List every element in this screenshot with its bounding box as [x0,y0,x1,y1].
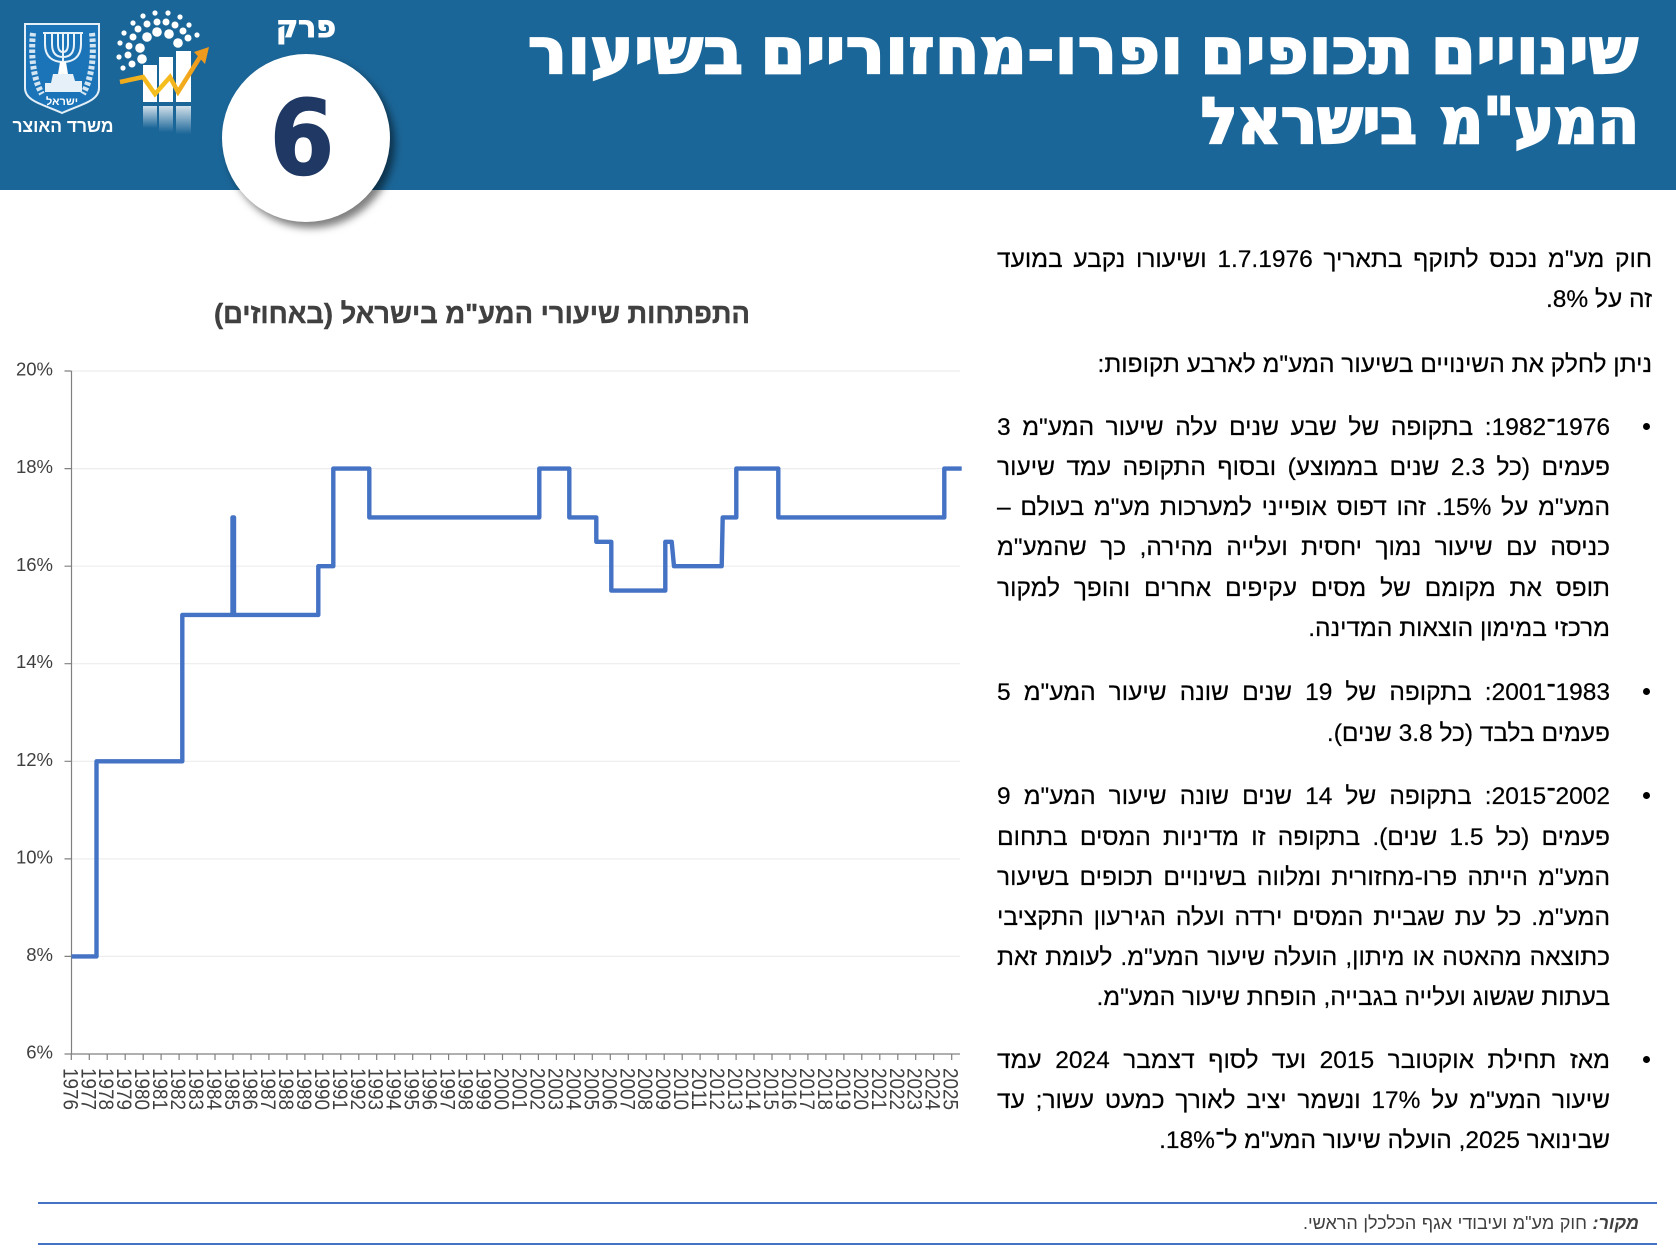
bullet: 1976-1982: כניסה עם שיעור נמוך יחסית ועלייה מהירה, כך שהמע"מ [997,534,1610,561]
x axis year labels: 2011 [687,1068,710,1110]
bullet: 1983-2001: פעמים בלבד (כל 3.8 שנים). [1327,720,1610,747]
x axis year labels: 2012 [705,1068,728,1110]
x axis year labels: 2013 [723,1068,746,1110]
title [528,15,1639,159]
x axis year labels: 2015 [759,1068,782,1110]
x axis year labels: 2017 [795,1068,818,1110]
x axis year labels: 1993 [364,1068,387,1110]
x axis year labels: 2004 [561,1068,584,1110]
x axis year labels: 1982 [166,1068,189,1110]
x axis year labels: 2021 [867,1068,890,1110]
panel: line chart of VAT rate [16,298,962,1110]
x axis year labels: 1989 [292,1068,315,1110]
x axis year labels: 2006 [597,1068,620,1110]
text block: intro: זה על 8%. [1546,286,1652,313]
y axis labels: 6% [26,1042,53,1062]
x axis year labels: 1994 [382,1068,405,1110]
chapter label: פרק [276,10,336,45]
bullet: 2002-2015: בעתות שגשוג ועלייה בגבייה, הופחת שיעור המע"מ. [1096,984,1610,1011]
x axis year labels: 1978 [94,1068,117,1110]
text block: four periods lead-in: ניתן לחלק את השינויים בשיעור המע"מ לארבע תקופות: [1098,351,1652,378]
text block: intro: חוק מע"מ נכנס לתוקף בתאריך 1.7.1976 ושיעורו נקבע במועד [997,246,1652,273]
x axis year labels: 1980 [130,1068,153,1110]
chart title: התפתחות שיעורי המע"מ בישראל (באחוזים) [214,298,750,329]
y axis labels: 12% [16,749,53,770]
chapter number: 6 [270,79,334,199]
x axis year labels: 1983 [184,1068,207,1110]
title: שינויים תכופים ופרו-מחזוריים בשיעור [528,15,1639,89]
x axis year labels: 2000 [490,1068,512,1110]
x axis year labels: 2022 [885,1068,908,1110]
x axis year labels: 2025 [939,1068,962,1110]
x axis year labels: 1995 [400,1068,423,1110]
x axis year labels: 1996 [418,1068,441,1110]
logo: chart with rising arrow [116,10,209,132]
x axis year labels: 2010 [669,1068,692,1110]
x axis year labels: 2018 [813,1068,836,1110]
y axis labels: 8% [26,944,53,965]
x axis year labels: 2023 [903,1068,926,1110]
bullet: 2015 to 2025: שבינואר 2025, הועלה שיעור המע"מ ל־18%. [1159,1127,1610,1154]
x axis year labels: 2016 [777,1068,800,1110]
logo: state emblem [12,23,114,136]
x axis year labels: 2003 [543,1068,566,1110]
x axis year labels: 1997 [436,1068,459,1110]
x axis year labels: 2005 [579,1068,602,1110]
bullet: 1983-2001: 1983־2001: בתקופה של 19 שנים שונה שיעור המע"מ 5 [997,679,1610,706]
bullet: 1976-1982 [996,414,1650,642]
bullet: 2002-2015 [997,783,1650,1011]
y axis labels: 14% [16,651,53,672]
x axis year labels: 1998 [454,1068,477,1110]
logo: state emblem: משרד האוצר [12,116,114,136]
x axis year labels: 2020 [849,1068,872,1110]
header band [0,0,1676,190]
y axis labels: 10% [16,846,53,868]
bullet: 1976-1982: 1976־1982: בתקופה של שבע שנים עלה שיעור המע"מ 3 [997,414,1610,441]
y axis labels [16,358,53,1062]
x axis year labels: 2024 [921,1068,944,1110]
x axis year labels: 1987 [256,1068,279,1110]
x axis year labels: 2019 [831,1068,854,1110]
bullet: 1983-2001 [997,679,1650,747]
logo: state emblem: ישראל [46,95,78,108]
x axis year labels: 1991 [328,1068,351,1110]
x axis year labels: 2009 [651,1068,674,1110]
bullet: 2015 to 2025: שיעור המע"מ על 17% ונשמר יציב לאורך כמעט עשור; עד [997,1087,1610,1114]
source note: מקור: חוק מע"מ ועיבודי אגף הכלכלן הראשי. [1303,1213,1639,1233]
bullet: 1976-1982: תופס את מקומם של מסים עקיפים אחרים והופך למקור [997,575,1610,602]
x axis year labels: 1979 [112,1068,135,1110]
x axis year labels: 1977 [76,1068,99,1110]
y axis labels: 20% [16,358,53,380]
data line: VAT rate step series [72,469,962,956]
bullet: 2015 to 2025: מאז תחילת אוקטובר 2015 ועד לסוף דצמבר 2024 עמד [997,1047,1610,1074]
bullet: 2002-2015: כתוצאה מהאטה או מיתון, הועלה שיעור המע"מ. לעומת זאת [997,944,1610,971]
x axis year labels: 1984 [202,1068,225,1110]
bullet: 2002-2015: המע"מ הייתה פרו-מחזורית ומלווה בשינויים תכופים בשיעור [997,864,1610,891]
x axis year labels: 1985 [220,1068,243,1110]
x axis year labels: 1992 [346,1068,369,1110]
bullet: 2002-2015: פעמים (כל 1.5 שנים). בתקופה זו מדיניות המסים בתחום [997,824,1610,851]
title: המע"מ בישראל [1201,85,1639,159]
x axis year labels [58,1068,962,1110]
x axis year labels: 1986 [238,1068,261,1110]
bullet: 1976-1982: פעמים (כל 2.3 שנים בממוצע) ובסוף התקופה עמד שיעור [997,454,1610,481]
y axis labels: 16% [16,554,53,575]
x axis year labels: 2008 [633,1068,656,1110]
chapter number circle [222,54,390,222]
bullet: 2002-2015: המע"מ. כל עת שגביית המסים ירדה ועלה הגירעון התקציבי [997,904,1610,931]
bullet: 1976-1982: המע"מ על 15%. זהו דפוס אופייני למערכות מע"מ בעולם – [997,494,1610,521]
x axis year labels: 2001 [508,1068,530,1110]
bullet: 2015 to 2025 [997,1047,1650,1154]
x axis year labels: 2007 [615,1068,638,1110]
x axis year labels: 1976 [58,1068,81,1110]
x axis year labels: 2014 [741,1068,764,1110]
x axis year labels: 1990 [310,1068,333,1110]
x axis year labels: 1981 [148,1068,171,1110]
x axis year labels: 1999 [472,1068,494,1110]
text block: intro [997,246,1652,313]
y axis labels: 18% [16,456,53,477]
x axis year labels: 2002 [525,1068,548,1110]
bullet: 2002-2015: 2002־2015: בתקופה של 14 שנים שונה שיעור המע"מ 9 [997,783,1610,810]
x axis year labels: 1988 [274,1068,297,1110]
bullet: 1976-1982: מרכזי במימון הוצאות המדינה. [1308,615,1610,642]
